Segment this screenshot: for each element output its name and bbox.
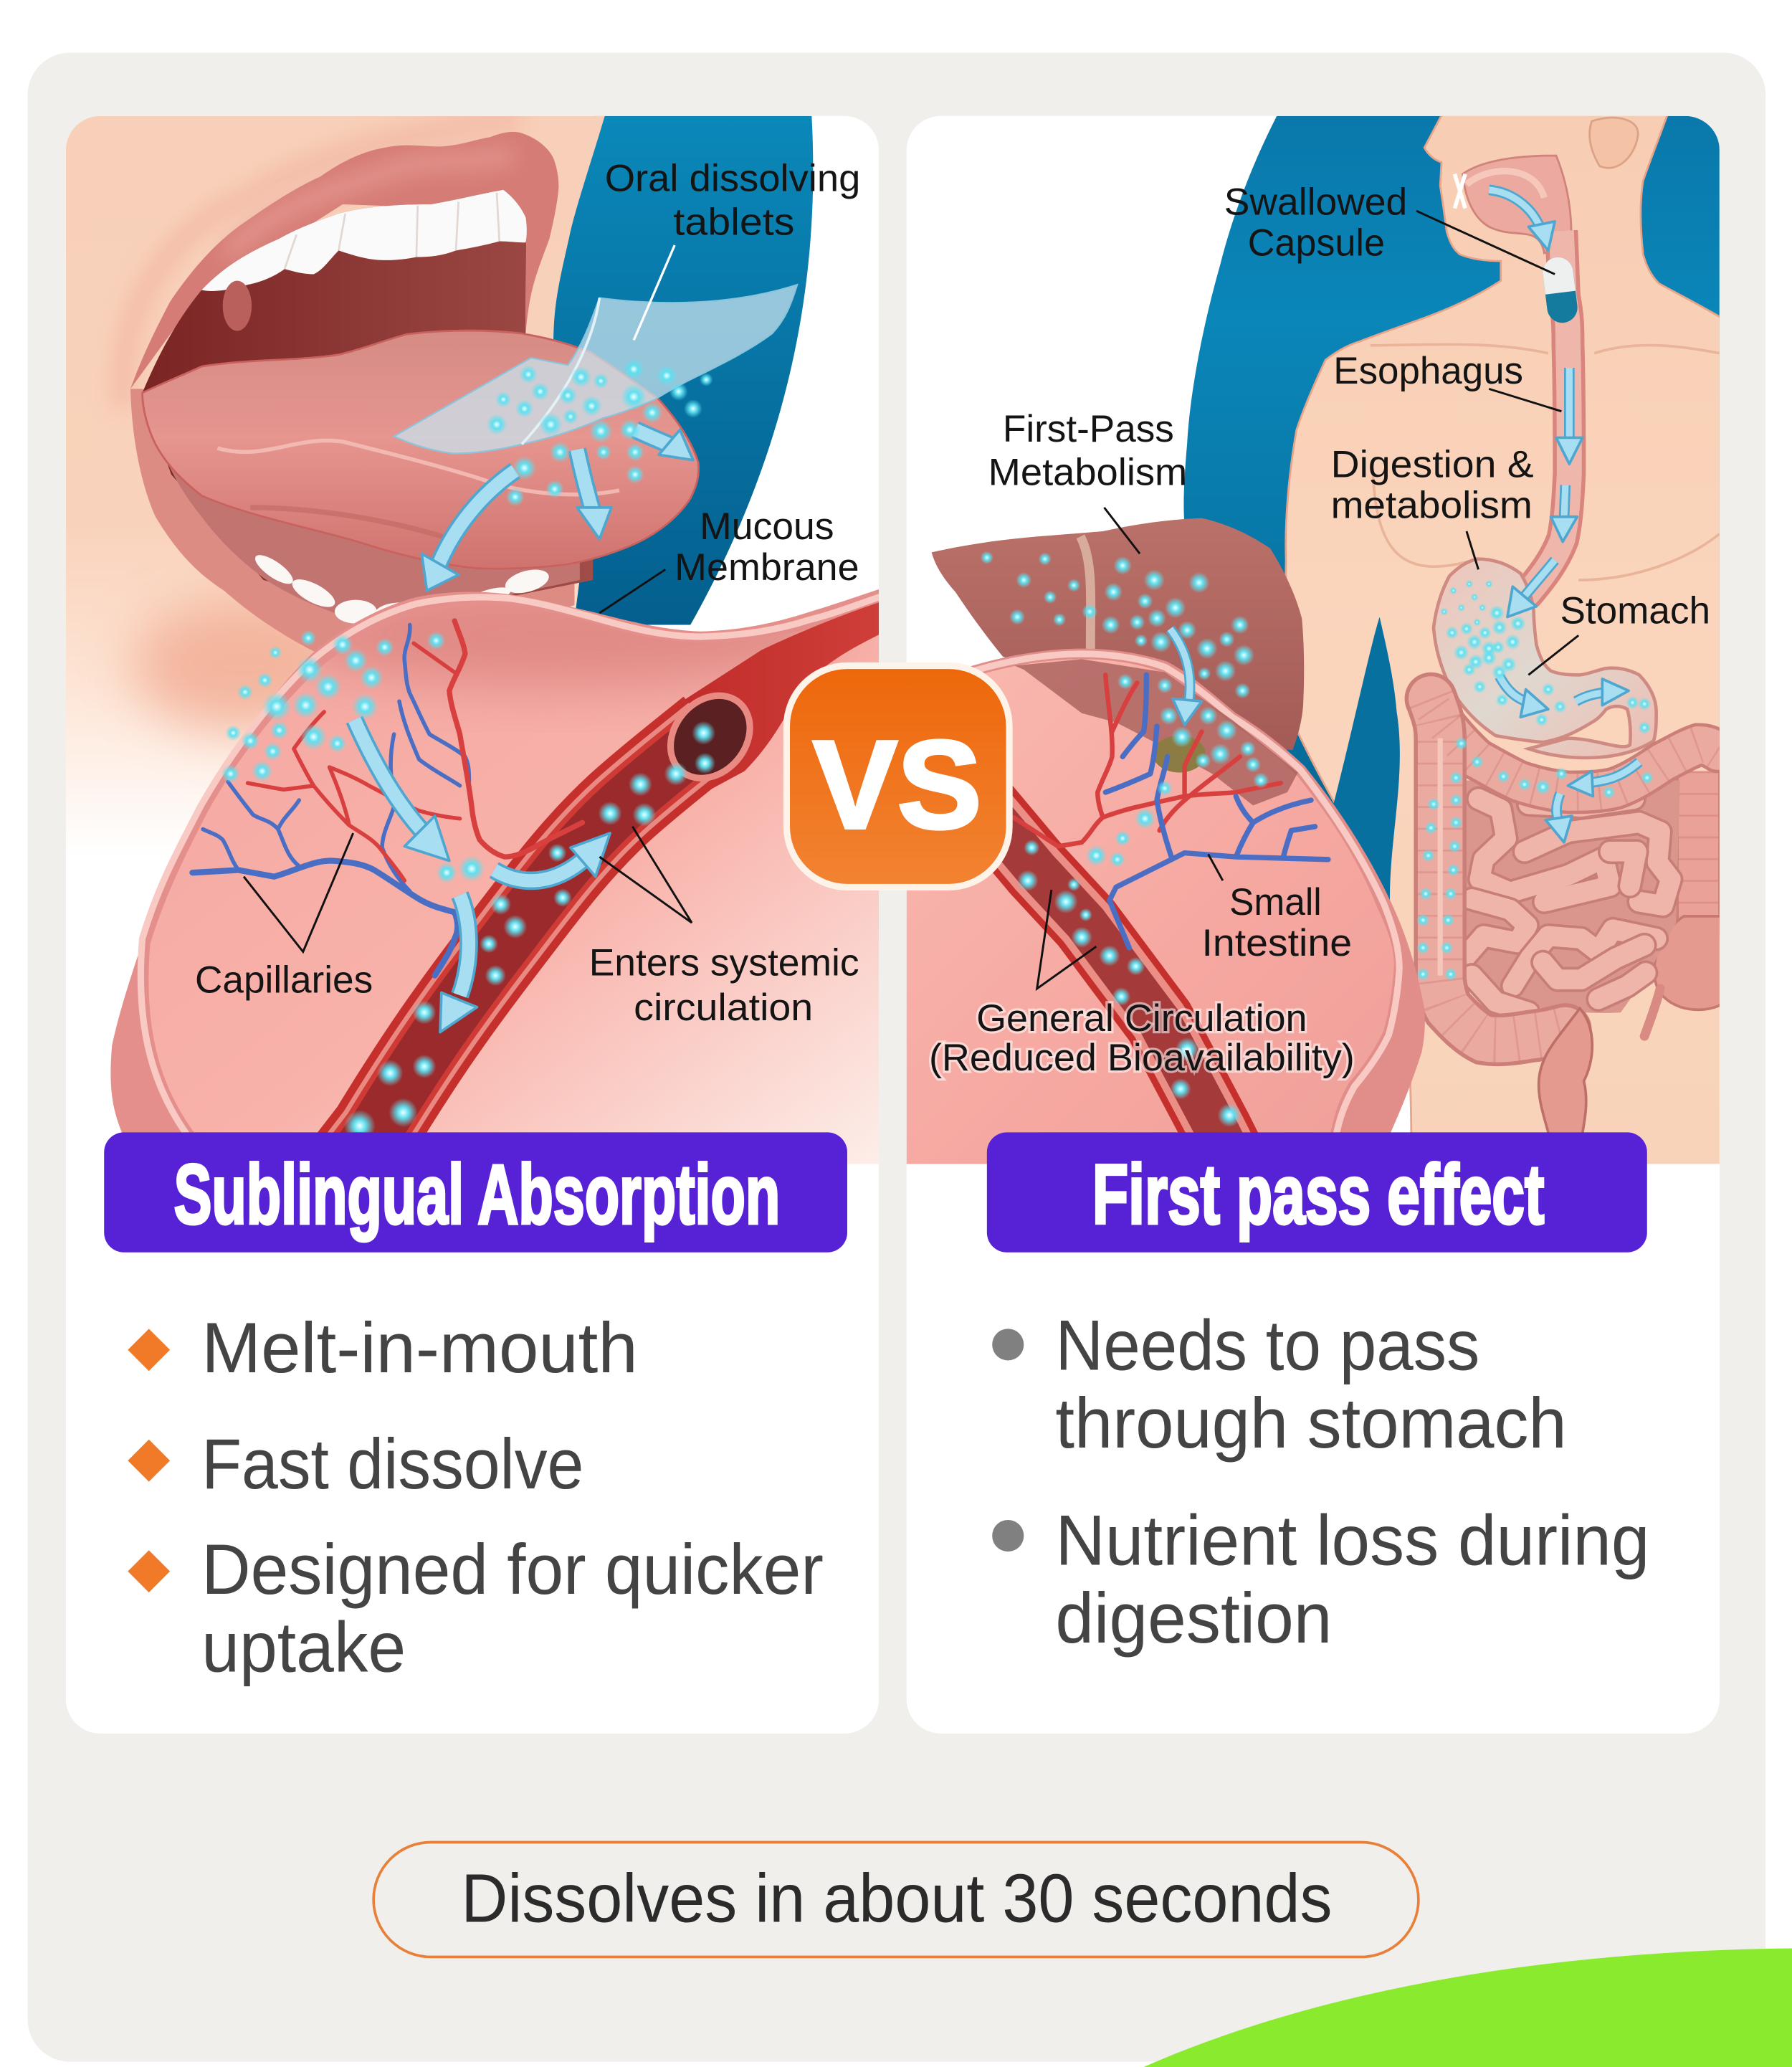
icon: diamond <box>128 1329 170 1371</box>
vessel opening <box>654 680 766 794</box>
flow arrows <box>1170 190 1639 842</box>
arrow: esophagus lower <box>1551 485 1577 542</box>
callout: dissolve time pill <box>373 1843 1419 1957</box>
absorbed particles <box>221 358 715 1141</box>
arrow: tongue down <box>577 450 611 539</box>
label: first-pass metabolism: First-Pass <box>1003 408 1174 450</box>
floor of mouth <box>169 466 580 613</box>
label: general circulation: General Circulation <box>976 997 1307 1040</box>
rosy skin around lips <box>123 118 522 407</box>
VS text: VS <box>813 716 981 855</box>
text: designed for quicker uptake: Designed for quicker <box>201 1530 824 1610</box>
label: swallowed capsule: Swallowed <box>1224 181 1407 224</box>
artery and vein vessel <box>343 601 883 1173</box>
stomach <box>1434 559 1657 758</box>
benefits list <box>128 1308 824 1687</box>
vessel tube <box>343 731 712 1173</box>
esophagus <box>1526 231 1569 596</box>
arrow: pylorus <box>1576 679 1629 705</box>
arrow: liver <box>1170 629 1201 725</box>
blue backdrop <box>1183 116 1720 923</box>
callout text: Dissolves in about 30 seconds <box>461 1861 1332 1937</box>
arrow: downward intestine <box>1545 794 1572 842</box>
left card background <box>66 116 879 1734</box>
illustration: digestive route <box>907 105 1739 1187</box>
gallbladder <box>1153 736 1206 772</box>
label: first-pass metabolism: Metabolism <box>988 452 1187 494</box>
leader lines left <box>244 245 692 952</box>
label: capillaries: Capillaries <box>195 959 373 1002</box>
heading bar: sublingual absorption <box>104 1132 847 1253</box>
VS badge <box>786 666 1009 887</box>
liver ligament <box>1080 536 1091 673</box>
icon: grey bullet <box>992 1329 1024 1360</box>
upper lip <box>130 132 558 389</box>
arrow: down vessel <box>440 895 477 1032</box>
colon centre line <box>1439 738 1441 976</box>
face skin <box>66 116 605 857</box>
panel: sublingual absorption <box>66 116 883 1734</box>
label: swallowed capsule: Capsule <box>1248 222 1385 265</box>
tissue cross-section edge <box>110 588 883 1164</box>
label: esophagus: Esophagus <box>1333 350 1523 392</box>
text: designed for quicker uptake: uptake <box>201 1607 406 1687</box>
tongue crease <box>217 440 619 495</box>
label: mucous membrane: Mucous <box>700 505 834 548</box>
lips and teeth <box>1454 174 1465 209</box>
text: melt-in-mouth: Melt-in-mouth <box>201 1308 638 1388</box>
liver seen through membrane <box>1014 659 1298 805</box>
mouth cavity and pharynx <box>1462 156 1571 253</box>
label: general circulation: (Reduced Bioavailability) <box>929 1037 1355 1079</box>
heading bar: first pass effect <box>987 1132 1647 1253</box>
arrow: tongue to floor of mouth <box>421 470 515 591</box>
arrow: into stomach <box>1507 560 1555 617</box>
uvula <box>223 281 252 331</box>
drawbacks list <box>992 1306 1649 1658</box>
tissue cross-section interior <box>148 603 883 1164</box>
icon: diamond <box>128 1440 170 1482</box>
label: mucous membrane: Membrane <box>675 546 859 589</box>
label: digestion and metabolism: metabolism <box>1331 485 1533 527</box>
absorbed particles <box>981 551 1654 1127</box>
arrow: to intestine <box>1568 762 1639 797</box>
label: oral dissolving tablets: Oral dissolving <box>605 158 860 200</box>
label: oral dissolving tablets: tablets <box>673 201 794 243</box>
label: enters systemic circulation: circulation <box>634 987 813 1029</box>
upper teeth <box>201 190 527 291</box>
label: enters systemic circulation: Enters systemic <box>589 942 859 984</box>
label: stomach: Stomach <box>1560 590 1710 632</box>
arrow: into capillaries <box>354 720 449 861</box>
tissue cross-section edge <box>907 649 1425 1164</box>
mouth interior <box>143 190 593 619</box>
lower teeth <box>251 550 551 624</box>
blue capillaries <box>192 625 469 976</box>
tissue upper shading <box>320 602 843 707</box>
arrow: into vessel <box>494 833 610 880</box>
arrow: throat <box>1489 190 1555 250</box>
blue gap between arm and torso <box>1333 617 1400 910</box>
arrow: esophagus upper <box>1556 368 1583 464</box>
heading text: First pass effect <box>1092 1146 1544 1241</box>
capsule <box>1541 255 1579 325</box>
membrane highlight <box>907 654 1399 1164</box>
arrow: stomach outflow <box>1500 676 1548 717</box>
label: digestion and metabolism: Digestion & <box>1331 444 1534 486</box>
text: needs to pass through stomach: Needs to pass <box>1055 1306 1479 1385</box>
red capillaries <box>248 621 582 880</box>
vessel right extension <box>659 601 883 817</box>
right colon <box>1644 771 1726 1036</box>
tongue <box>143 331 699 569</box>
flow arrows <box>354 429 693 1032</box>
text: nutrient loss during digestion: Nutrient loss during <box>1055 1501 1649 1580</box>
text: fast dissolve: Fast dissolve <box>201 1425 583 1504</box>
icon: grey bullet <box>992 1520 1024 1552</box>
systemic vessel <box>981 804 1239 1173</box>
upper lip highlight <box>231 156 507 250</box>
film fold <box>522 298 599 445</box>
lower lip <box>130 389 574 655</box>
icon: diamond <box>128 1550 170 1592</box>
colon <box>1431 698 1718 1164</box>
colon haustra <box>1431 698 1565 1040</box>
green corner accent <box>1144 1949 1792 2067</box>
heading text: Sublingual Absorption <box>174 1146 780 1241</box>
small intestine <box>1465 780 1680 1013</box>
tongue lower fold <box>250 508 454 541</box>
palate <box>1467 171 1544 198</box>
leader lines right <box>1037 211 1578 989</box>
illustration: mouth and bloodstream <box>66 116 883 1173</box>
tissue cross-section interior <box>907 659 1394 1164</box>
red capillaries <box>1014 675 1281 846</box>
blue capillaries <box>1105 675 1328 948</box>
label: small intestine: Small <box>1229 881 1322 923</box>
liver <box>932 518 1304 750</box>
arrow: tongue tip <box>635 429 693 460</box>
rectum <box>1539 1009 1592 1164</box>
label: small intestine: Intestine <box>1201 922 1352 964</box>
membrane highlight <box>140 596 883 1164</box>
torso and head <box>1285 105 1739 1187</box>
ear <box>1590 118 1638 168</box>
peach shadow under lip <box>132 600 356 731</box>
dissolving film <box>394 285 797 453</box>
right card background <box>907 116 1720 1734</box>
panel: first pass effect <box>907 105 1739 1734</box>
collarbone and chest shading <box>1371 344 1720 580</box>
text: needs to pass through stomach: through stomach <box>1055 1384 1567 1463</box>
blue backdrop <box>540 116 813 625</box>
text: nutrient loss during digestion: digestion <box>1055 1579 1332 1658</box>
